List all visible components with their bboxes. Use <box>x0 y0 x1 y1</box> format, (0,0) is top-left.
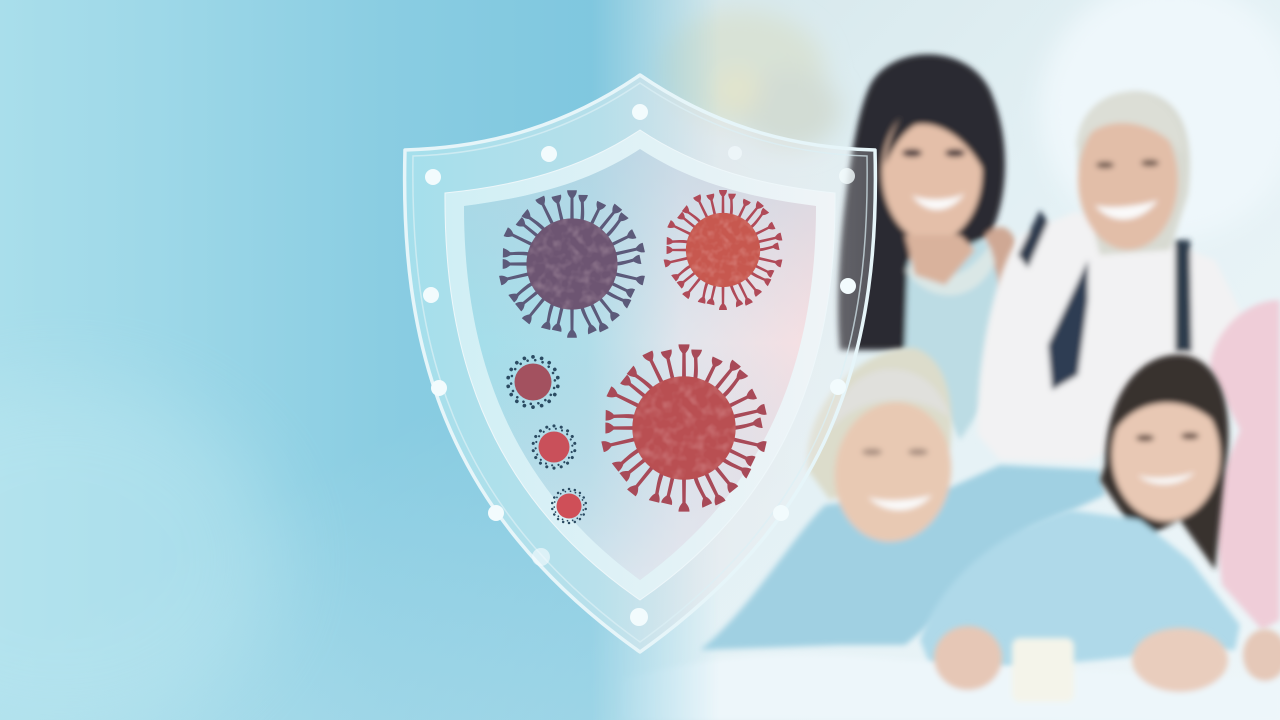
shield inner ring <box>445 130 835 600</box>
shield rivets <box>423 104 856 626</box>
small virus 2 <box>531 424 577 470</box>
table, mug and hands <box>926 624 1280 701</box>
person: older man <box>978 91 1245 462</box>
shield outer body <box>405 75 875 652</box>
blurred foliage <box>655 0 1280 240</box>
virus: purple <box>499 190 645 338</box>
blurred family photo <box>560 0 1280 720</box>
shield <box>405 75 875 652</box>
small virus 1 <box>506 355 560 409</box>
virus: large red <box>601 344 767 512</box>
person: blond woman bottom left <box>700 348 1105 650</box>
shield panel shading <box>464 149 816 580</box>
virus: red upper <box>664 190 782 310</box>
shield outer hairline <box>413 83 867 642</box>
person: brunette woman bottom right <box>920 355 1240 670</box>
person: woman top centre <box>838 54 1018 440</box>
shield inner panel <box>464 149 816 580</box>
person: pink shirt at right <box>1210 300 1280 630</box>
small virus 3 <box>551 488 587 524</box>
